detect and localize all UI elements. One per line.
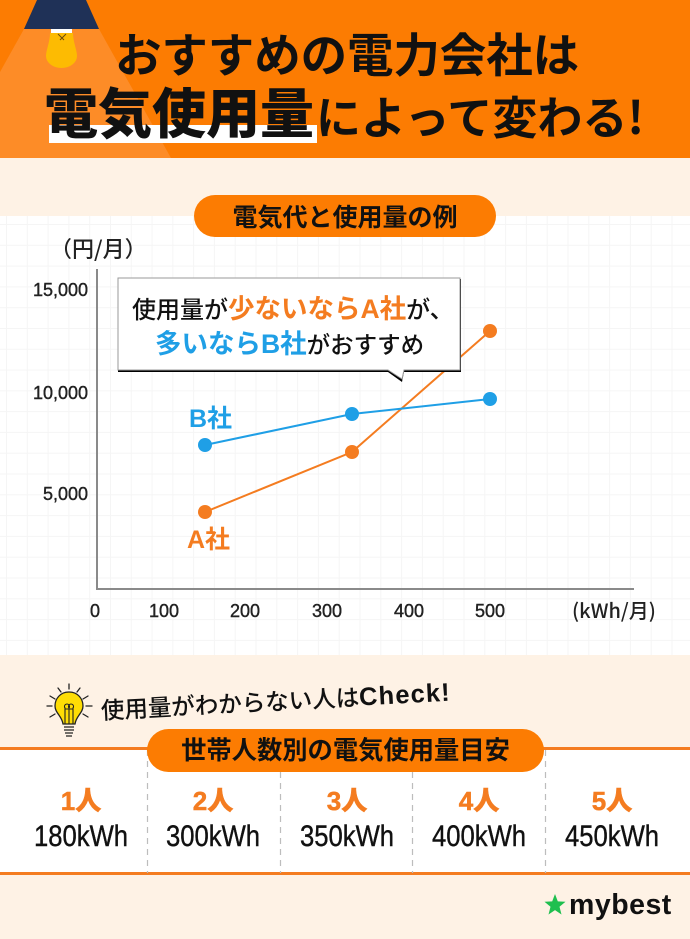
column: 4人: [432, 786, 526, 853]
column: 5人: [565, 786, 659, 853]
series: A社: [198, 324, 497, 519]
x axis labels: 0: [90, 601, 100, 621]
label: B社: B社: [189, 405, 232, 433]
label: A社: A社: [187, 526, 230, 554]
callout: [118, 278, 461, 382]
column: 3人: [300, 786, 394, 853]
title line 1: おすすめの電力会社は: [115, 19, 579, 86]
column: 2人: [166, 786, 260, 853]
table heading text: 世帯人数別の電気使用量目安: [181, 731, 510, 767]
x axis labels: 300: [312, 601, 342, 621]
header banner: [0, 0, 690, 158]
x axis unit: (kWh/月): [572, 595, 656, 624]
column: 5人: 450kWh: [565, 820, 659, 853]
axes: [97, 269, 634, 589]
y axis unit: （円/月）: [50, 232, 147, 264]
wordmark: mybest: [569, 889, 672, 921]
table heading pill: [147, 729, 544, 772]
column: 1人: 1人: [61, 786, 101, 816]
icon: light bulb: [46, 683, 93, 737]
x axis labels: [90, 601, 505, 621]
line chart: [96, 269, 634, 590]
x axis labels: 500: [475, 601, 505, 621]
y axis labels: 5,000: [43, 484, 88, 504]
y axis labels: 15,000: [33, 280, 88, 300]
check note: 使用量がわからない人はCheck!: [100, 678, 451, 726]
column: 2人: 2人: [193, 786, 233, 816]
logo: mybest: [544, 889, 672, 921]
chart heading pill: [194, 195, 496, 237]
title line 2: 電気使用量: [44, 70, 314, 149]
dashed dividers: [146, 750, 546, 873]
column: 2人: 300kWh: [166, 820, 260, 853]
callout text line 2: 多いならB社がおすすめ: [155, 326, 424, 360]
column: 5人: 5人: [592, 786, 632, 816]
column: 4人: 4人: [459, 786, 499, 816]
title line 2 continued: によって変わる!: [316, 82, 644, 147]
callout text line 1: 使用量が少ないならA社が、: [132, 290, 454, 325]
column: 1人: [34, 786, 128, 853]
x axis labels: 100: [149, 601, 179, 621]
icon: ceiling lamp with bulb: [0, 0, 171, 158]
icon: green star: [544, 894, 566, 914]
column: 3人: 350kWh: [300, 820, 394, 853]
x axis labels: 400: [394, 601, 424, 621]
y axis labels: [33, 280, 88, 504]
column: 1人: 180kWh: [34, 820, 128, 853]
y axis labels: 10,000: [33, 383, 88, 403]
panel: chart area: [0, 216, 690, 655]
series: B社: [198, 392, 497, 452]
chart heading text: 電気代と使用量の例: [232, 198, 458, 234]
column: 4人: 400kWh: [432, 820, 526, 853]
panel: household usage table: [0, 747, 690, 875]
x axis labels: 200: [230, 601, 260, 621]
highlight under keyword: [49, 125, 317, 143]
column: 3人: 3人: [327, 786, 367, 816]
